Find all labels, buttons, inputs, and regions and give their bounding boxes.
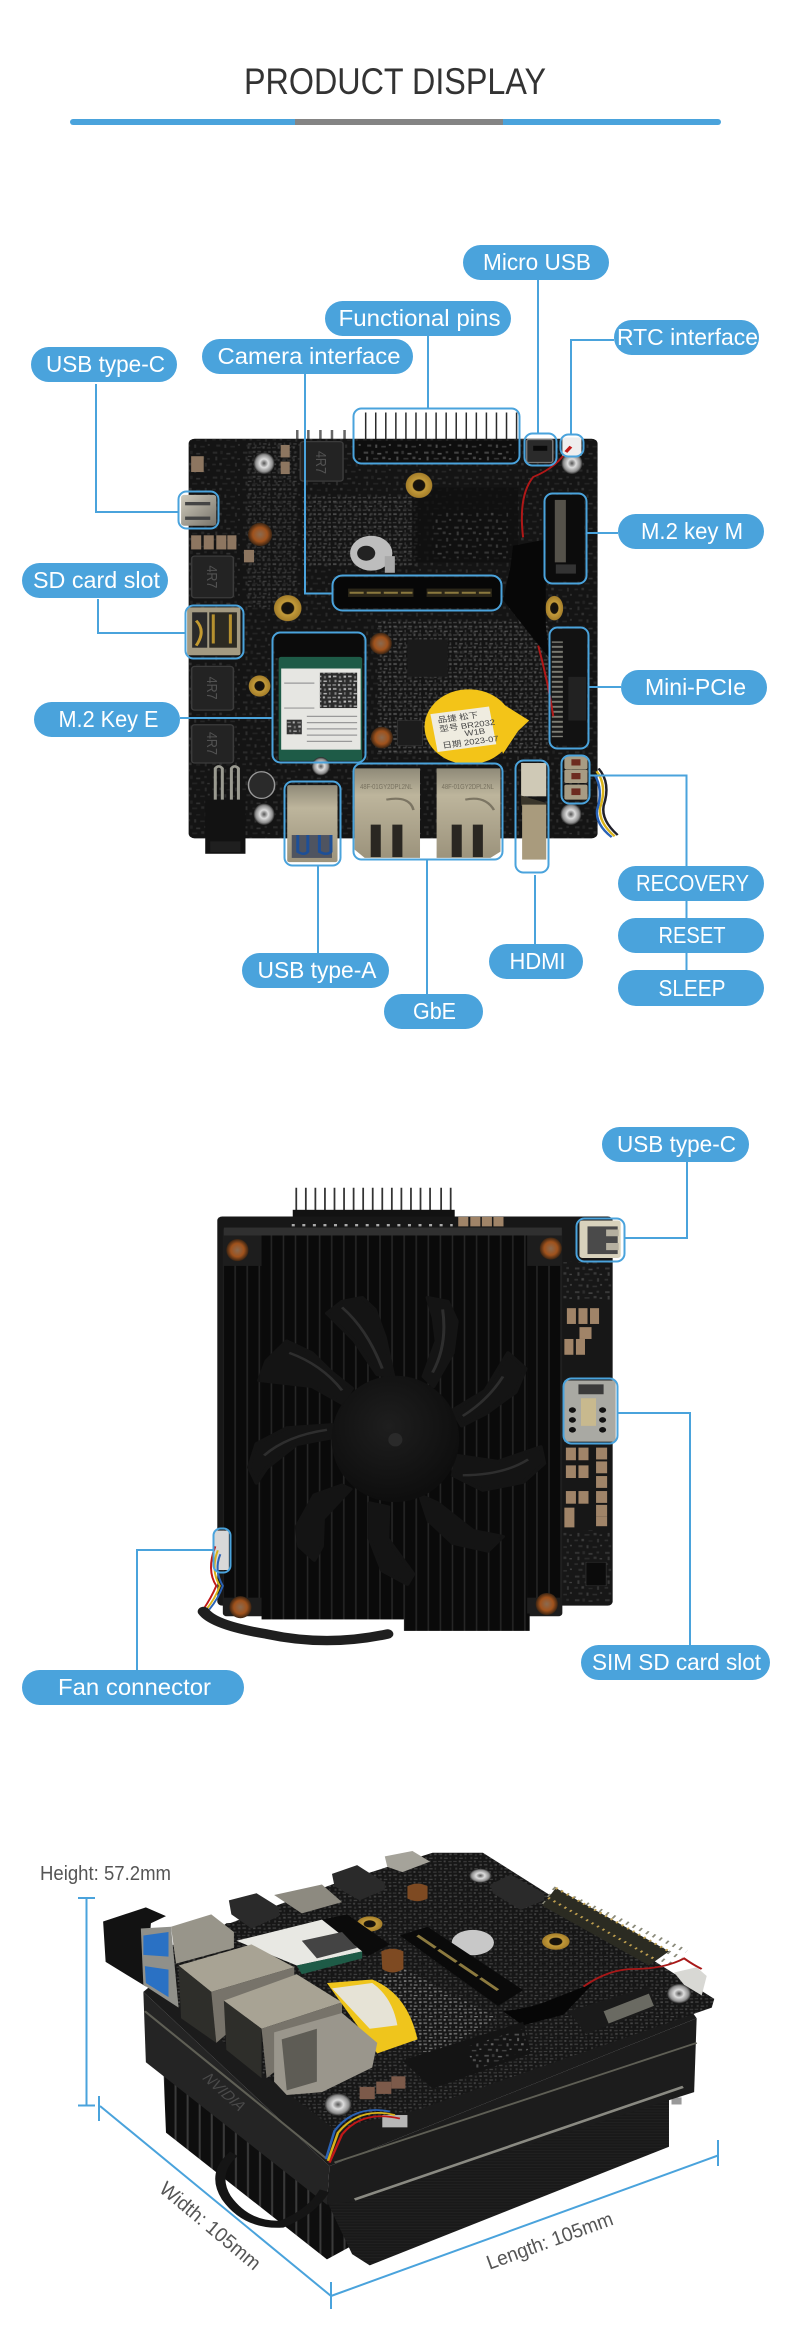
label: Mini-PCIe [621,670,767,705]
height dimension: Height: 57.2mm [40,1863,171,1885]
capacitor [248,772,275,798]
header pins [297,412,517,442]
USB-A [171,1914,234,1964]
label: SLEEP [618,970,764,1006]
height dimension [40,1863,171,2106]
battery [327,1980,417,2053]
label: M.2 key M [618,514,764,549]
Mini-PCIe connector [551,629,587,746]
inductors [192,442,343,763]
camera connector [334,577,500,608]
label: M.2 key M: M.2 key M [641,518,743,544]
black tape [503,539,549,658]
standoffs [357,1916,383,1932]
label: Functional pins: Functional pins [338,305,500,331]
board [156,1853,714,2129]
top edge highlights [145,2011,697,2163]
label: GbE: GbE [413,998,456,1024]
fins left [163,2071,352,2259]
label: HDMI [489,944,583,979]
board photo: bottom view with heatsink and fan [203,1188,621,1641]
RJ45 2 [224,1974,342,2029]
label: M.2 Key E [34,702,180,737]
fan wires [595,768,618,837]
tan capacitors [191,445,290,562]
label: RECOVERY: RECOVERY [636,870,749,896]
fan wires [326,2110,400,2163]
label: Functional pins [325,301,511,336]
label: SD card slot [22,563,168,598]
fan blades [249,1298,544,1584]
header base [355,441,519,462]
length dimension [331,2140,718,2296]
HDMI [274,2013,377,2095]
heatsink plate left [143,1992,329,2205]
pin header [543,1888,687,1965]
pcb [217,1217,613,1606]
label: RESET: RESET [658,922,726,948]
HDMI [521,763,546,796]
RJ45 ports [355,768,500,858]
board photo: top view of carrier board: 型号 BR2032 [439,717,496,734]
heatsink plate right [327,2018,697,2205]
logo on side: NVIDIA [198,2072,251,2114]
label: RTC interface: RTC interface [617,324,758,350]
board photo: top view of carrier board: 4R7 [204,732,221,755]
micro USB [527,440,553,462]
SD slot [187,607,240,655]
title underline bar [70,119,721,125]
M.2 M connector [546,495,584,582]
board photo: top view of carrier board: W1B [464,726,486,738]
label: SD card slot: SD card slot [33,567,161,593]
RTC connector [562,437,581,456]
camera connector [400,1927,523,2006]
label: Micro USB [463,245,609,280]
SIM slot [564,1380,616,1442]
standoffs [405,472,433,498]
red wire [522,448,568,716]
label: SLEEP: SLEEP [658,975,726,1001]
board photo: top view of carrier board [181,412,618,862]
wifi card [322,1914,390,1957]
board photo: top view of carrier board: 4R7 [204,565,221,588]
USB-C [181,495,216,526]
fan cable [220,2154,324,2224]
label: GbE [384,994,483,1029]
M.2 M [568,1987,656,2034]
fan cable [204,1612,387,1641]
label: USB type-C rear: USB type-C [617,1131,736,1157]
label: USB type-A [242,953,389,988]
black tape [503,1983,594,2025]
label: USB type-C: USB type-C [46,351,165,377]
red cable [583,1958,702,1987]
heatsink [223,1227,562,1616]
SD slot [274,1884,342,1913]
main chip [407,639,448,677]
inductors [332,1865,385,1900]
RTC connector [674,1967,707,1995]
fan wires [203,1546,223,1610]
label: USB type-C [31,347,177,382]
USB-A [287,785,338,862]
power connector [103,1907,166,1987]
label: Camera interface [202,339,413,374]
buttons [360,2076,405,2099]
board photo: top view of carrier board: 4R7 [313,451,330,474]
screws [254,452,275,474]
label: SIM SD card slot: SIM SD card slot [592,1649,762,1675]
label: RECOVERY [618,866,764,901]
fan connector [382,2115,407,2127]
corner screws [226,1239,248,1261]
label: Camera interface: Camera interface [218,343,400,369]
buttons [564,756,588,800]
label: RESET [618,918,764,953]
board photo: top view of carrier board: 4R7 [204,677,221,700]
board photo: top view of carrier board: 品捷 松下 [437,709,479,725]
label: Micro USB: Micro USB [483,249,591,275]
width dimension: Width: 105mm [155,2178,265,2275]
label: USB type-A: USB type-A [258,957,377,983]
M.2 E module [275,633,363,658]
label: SIM SD card slot [581,1645,770,1680]
fins right [327,2096,669,2265]
micro usb [385,1851,430,1872]
callout lines and highlight boxes [96,280,690,1670]
USB-C port [579,1220,621,1258]
label: M.2 Key E: M.2 Key E [58,706,158,732]
RJ45 ports: 48F-01GY2DPL2NL [442,783,494,791]
heatsink top surface [143,1906,697,2166]
power connector [215,766,238,800]
logo [350,536,392,571]
Mini-PCIe [402,2022,531,2089]
title: PRODUCT DISPLAY [244,61,546,102]
product photo: 3D view with heatsink [103,1851,714,2265]
label: Mini-PCIe: Mini-PCIe [645,674,746,700]
header pins [296,1188,451,1213]
copper capacitors [407,1884,428,1901]
logo [452,1930,494,1955]
board photo: top view of carrier board: 日期 2023-07 [442,734,500,750]
label: HDMI: HDMI [510,948,566,974]
fan connector [214,1531,229,1570]
battery [425,689,529,764]
RJ45 1 [179,1944,294,1992]
label: Fan connector: Fan connector [58,1674,211,1700]
label: USB type-C rear [602,1127,749,1162]
length dimension: Length: 105mm [484,2208,616,2274]
RJ45 ports: 48F-01GY2DPL2NL [360,783,413,791]
label: Fan connector [22,1670,244,1705]
fan hub [331,1376,459,1502]
width dimension [99,2096,331,2309]
